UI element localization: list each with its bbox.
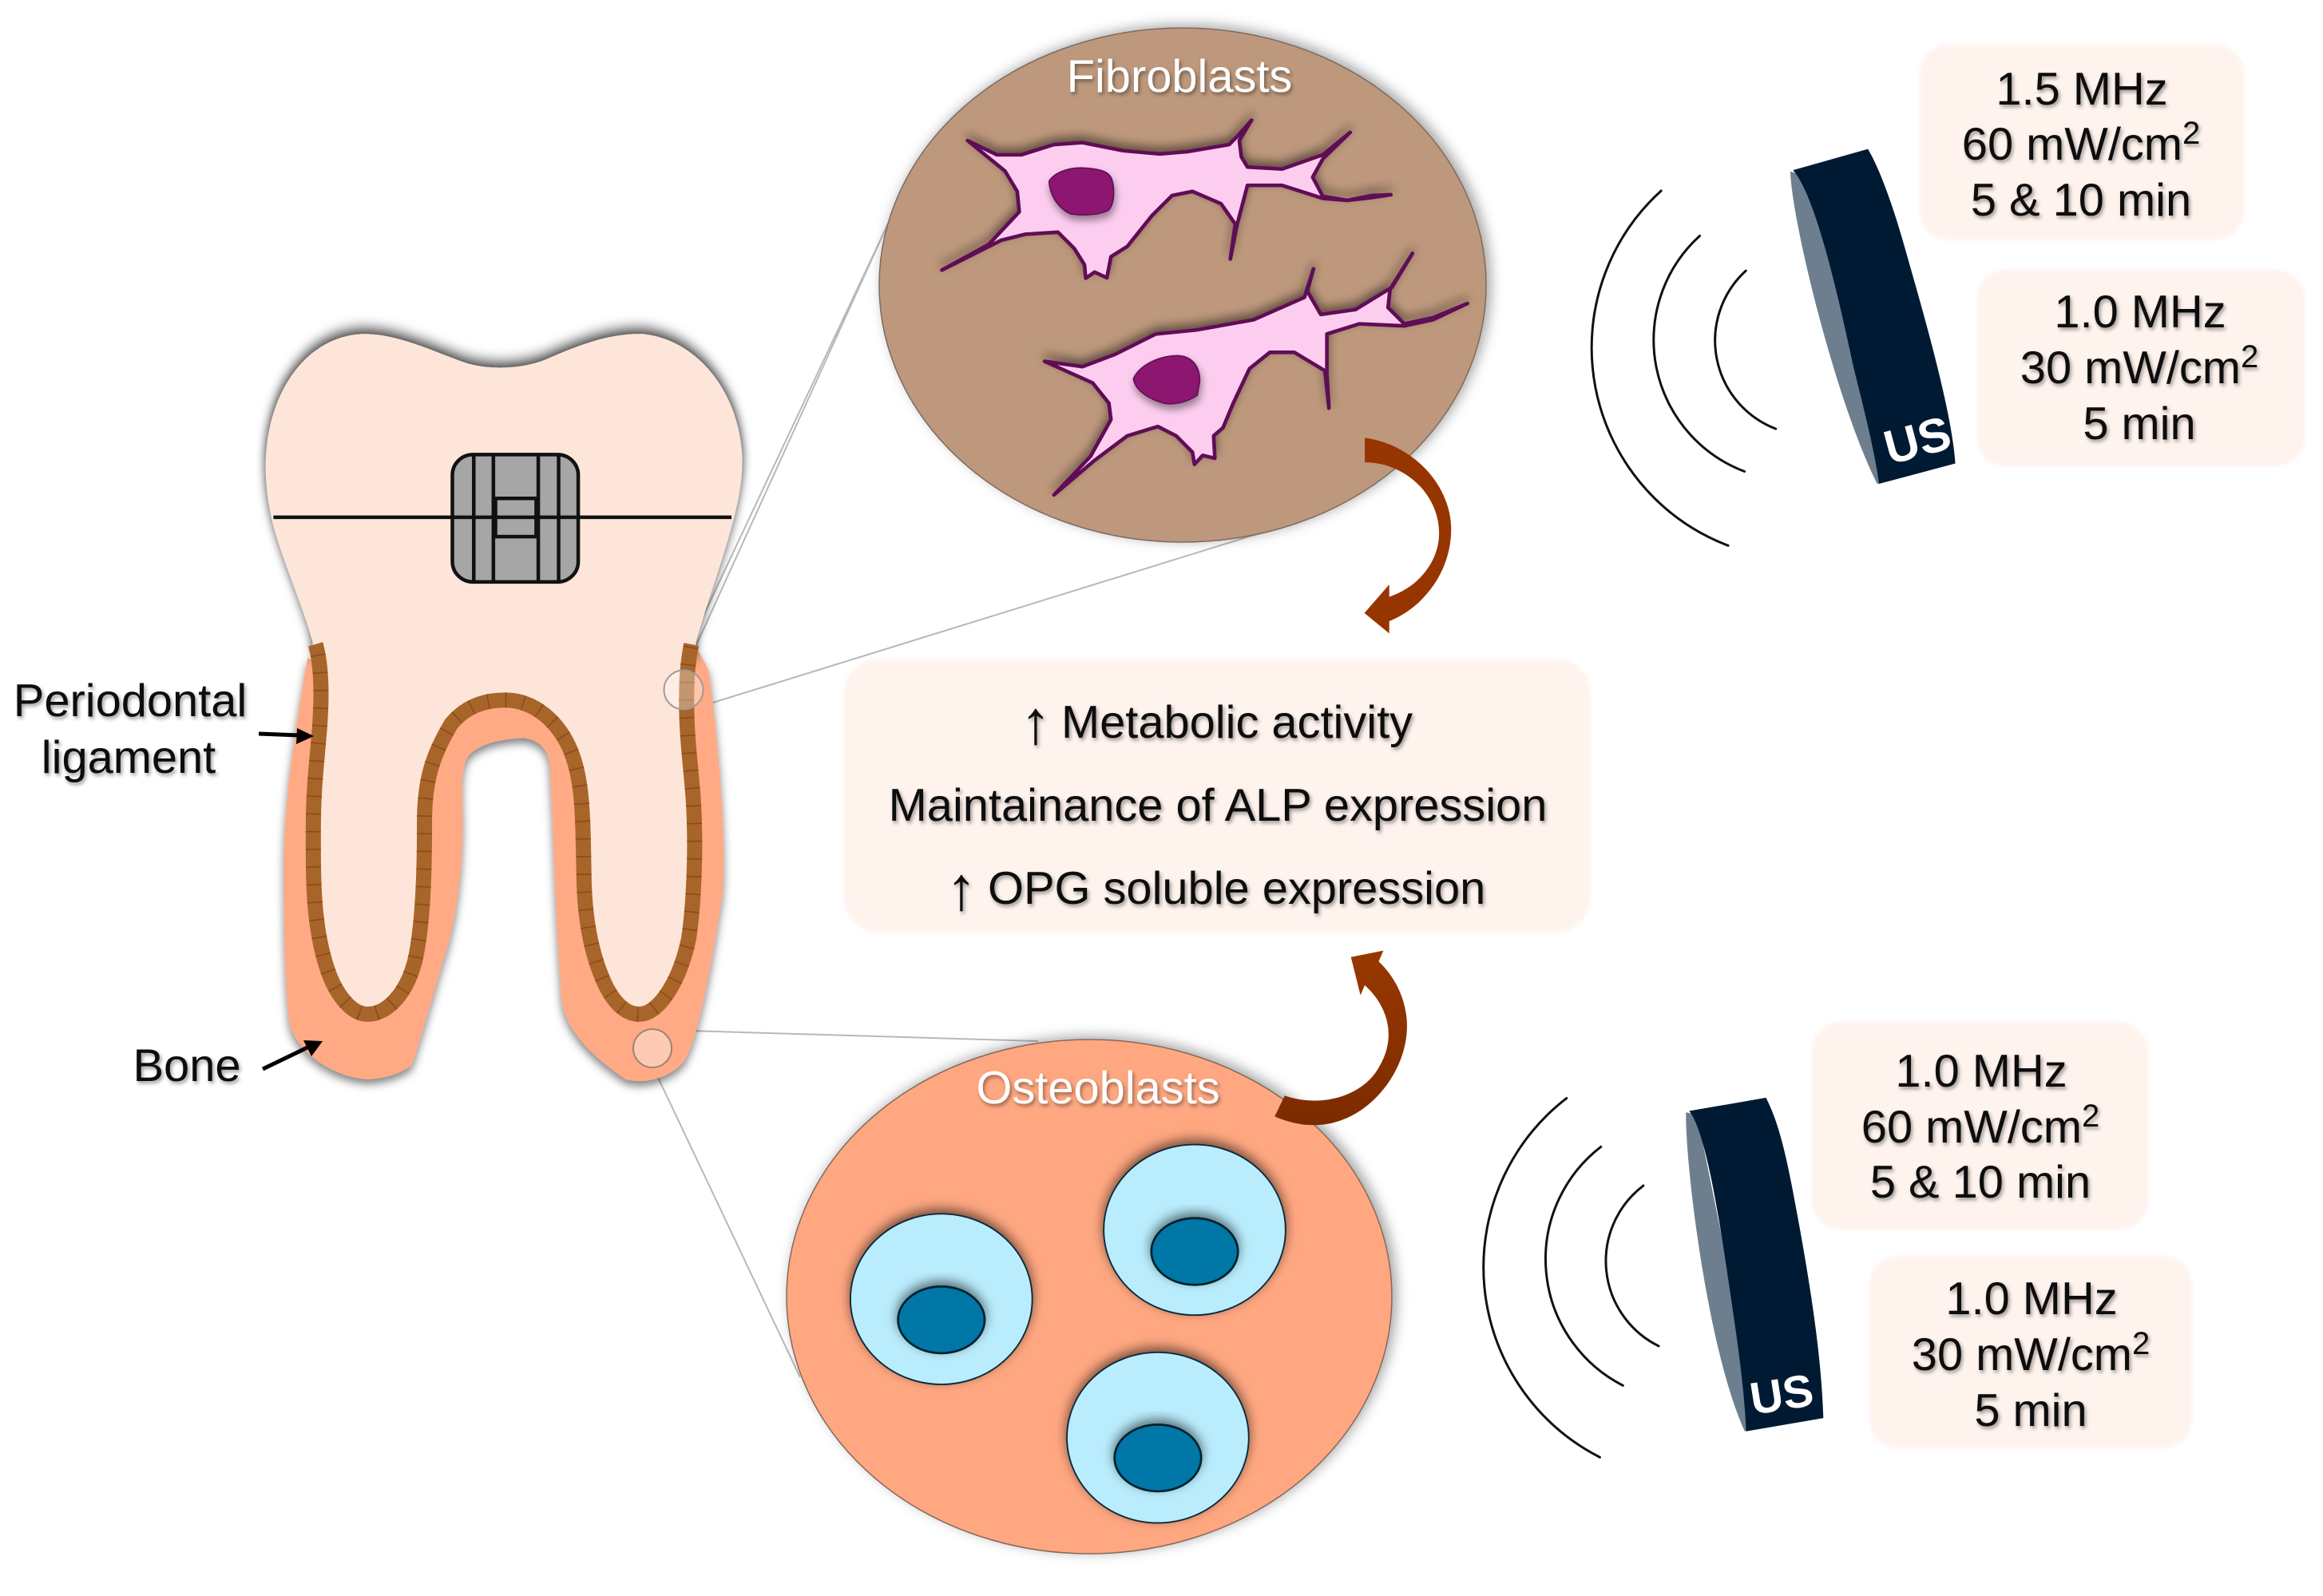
heading: fibroblasts: Fibroblasts xyxy=(1067,51,1292,102)
arrow: periodontal ligament xyxy=(259,728,314,744)
label: periodontal ligament: Periodontal xyxy=(14,675,247,727)
effect: ALP expression: Maintainance of ALP expression xyxy=(889,780,1547,831)
bone xyxy=(284,650,723,1081)
settings box: 1.5 MHz: 5 & 10 min xyxy=(1971,175,2191,226)
settings box: 1.5 MHz xyxy=(1920,45,2244,240)
tooth roots and ligament xyxy=(313,644,695,1014)
label: bone: Bone xyxy=(133,1040,240,1091)
ultrasound probe bottom xyxy=(1686,1098,1823,1432)
curved arrow: fibroblasts to effects xyxy=(1365,438,1451,633)
settings box: 1.0 MHz top: 30 mW/cm xyxy=(2020,343,2241,394)
effect: OPG expression: ↑ xyxy=(946,854,977,923)
panel: osteoblasts xyxy=(787,1040,1392,1554)
settings box: 1.0 MHz top: 2 xyxy=(2241,339,2258,374)
settings box: 1.0 MHz top xyxy=(1977,270,2305,466)
panel: effects summary xyxy=(844,659,1591,933)
ultrasound probe bottom: US xyxy=(1746,1364,1817,1425)
settings box: 1.0 MHz top: 5 min xyxy=(2083,398,2196,449)
effect: metabolic activity: Metabolic activity xyxy=(1061,697,1413,748)
ultrasound probe top xyxy=(1790,149,1956,484)
settings box: 1.0 MHz 30: 2 xyxy=(2132,1326,2150,1361)
settings box: 1.0 MHz 30: 5 min xyxy=(1974,1385,2087,1436)
effect: OPG expression: OPG soluble expression xyxy=(988,863,1485,914)
ultrasound waves top xyxy=(1592,191,1776,545)
osteoblast cell right xyxy=(1104,1145,1286,1315)
magnification lines xyxy=(653,222,1259,1377)
tooth crown xyxy=(266,334,743,659)
osteoblast cell bottom xyxy=(1067,1352,1249,1523)
effect: metabolic activity xyxy=(1021,688,1413,757)
ultrasound probe top: US xyxy=(1878,406,1956,475)
label: periodontal ligament xyxy=(14,675,247,783)
settings box: 1.0 MHz 30: 1.0 MHz xyxy=(1945,1273,2118,1325)
label: periodontal ligament: ligament xyxy=(42,732,216,783)
fibroblast cell 1 xyxy=(941,121,1391,278)
heading: osteoblasts: Osteoblasts xyxy=(976,1063,1220,1114)
highlight circle: ligament xyxy=(664,671,703,709)
settings box: 1.0 MHz 60: 60 mW/cm xyxy=(1861,1102,2082,1153)
settings box: 1.0 MHz 60: 5 & 10 min xyxy=(1870,1157,2091,1208)
settings box: 1.0 MHz 60: 2 xyxy=(2082,1099,2099,1134)
settings box: 1.5 MHz: 60 mW/cm xyxy=(1962,119,2182,170)
curved arrow: osteoblasts to effects xyxy=(1274,951,1407,1125)
settings box: 1.0 MHz top: 1.0 MHz xyxy=(2054,287,2226,338)
settings box: 1.0 MHz 60 xyxy=(1812,1022,2148,1230)
tooth diagram xyxy=(266,334,743,1081)
settings box: 1.0 MHz 60: 1.0 MHz xyxy=(1895,1046,2067,1097)
fibroblast cell 2 xyxy=(1045,253,1468,495)
settings box: 1.5 MHz: 2 xyxy=(2182,116,2200,151)
settings box: 1.0 MHz 30: 30 mW/cm xyxy=(1912,1329,2132,1380)
osteoblast cell left xyxy=(850,1214,1033,1384)
arrow: bone xyxy=(263,1040,323,1069)
highlight circle: bone xyxy=(633,1029,672,1067)
panel: fibroblasts xyxy=(879,28,1486,542)
settings box: 1.5 MHz: 1.5 MHz xyxy=(1996,64,2168,115)
settings box: 1.0 MHz 30 xyxy=(1869,1256,2192,1448)
ultrasound waves bottom xyxy=(1484,1099,1659,1457)
orthodontic bracket and wire xyxy=(273,454,731,582)
effect: metabolic activity: ↑ xyxy=(1021,688,1051,757)
effect: OPG expression xyxy=(946,854,1485,923)
